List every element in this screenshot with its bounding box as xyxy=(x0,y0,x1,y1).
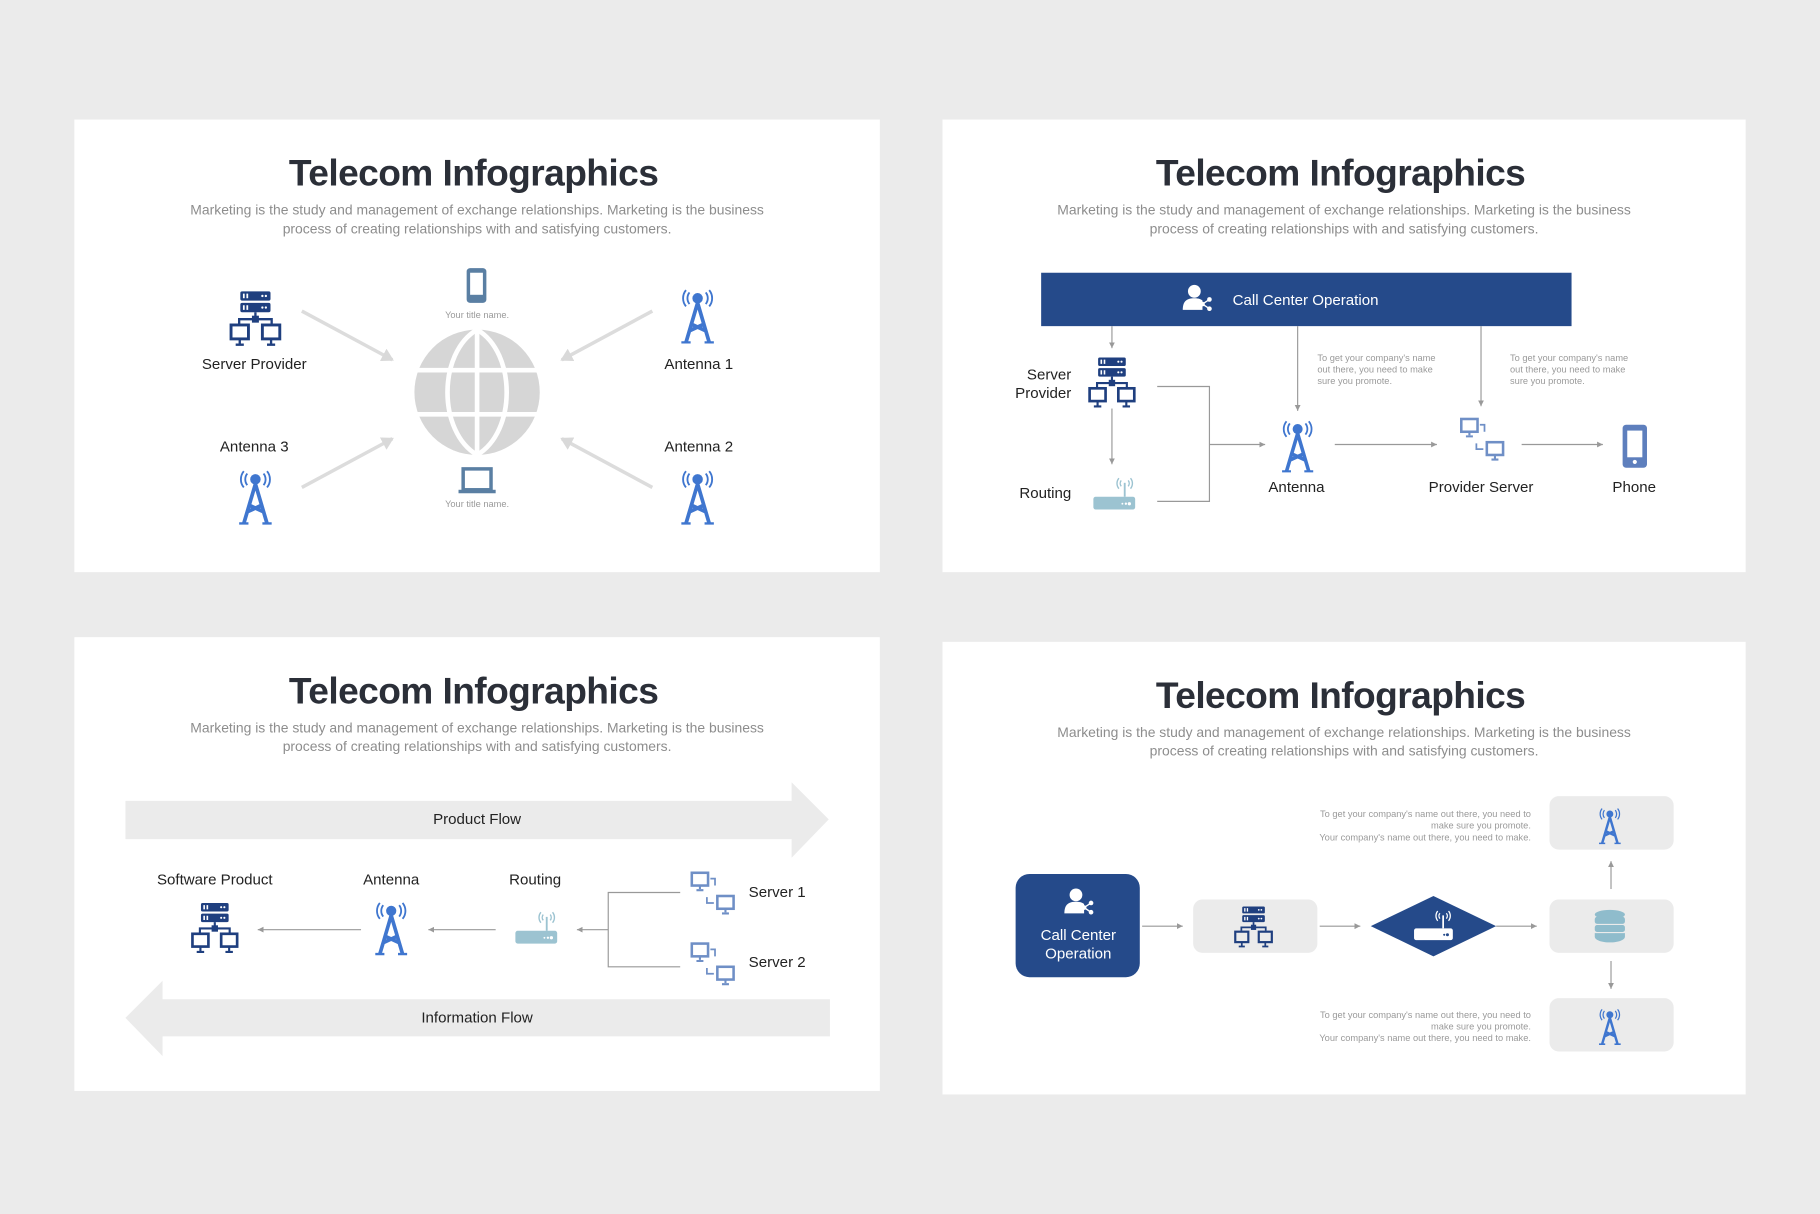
arrow: information flow xyxy=(125,981,830,1056)
node: routing xyxy=(1019,478,1135,510)
node: server 2: Server 2 xyxy=(749,954,806,971)
connectors xyxy=(1112,326,1603,501)
note text bottom: make sure you promote. xyxy=(1431,1021,1531,1031)
note texts: sure you promote. xyxy=(1317,376,1392,386)
icon: antenna 1 xyxy=(664,290,733,373)
note text top: To get your company's name out there, you need to xyxy=(1320,809,1531,819)
icon: laptop bottom: Your title name. xyxy=(445,499,509,509)
note texts: To get your company's name xyxy=(1510,353,1628,363)
box: antenna bottom xyxy=(1549,998,1674,1052)
panel: hub diagram xyxy=(74,120,880,572)
node: server 2 xyxy=(692,944,806,984)
arrow: product flow xyxy=(125,782,829,858)
diamond: router xyxy=(1371,896,1496,956)
node: antenna xyxy=(1268,421,1325,496)
title: Telecom Infographics xyxy=(1156,152,1525,194)
note text top xyxy=(1319,809,1531,842)
subtitle xyxy=(1057,724,1631,759)
subtitle: Marketing is the study and management of exchange relationships. Marketing is the business xyxy=(1057,202,1631,218)
panel: call center flow xyxy=(942,120,1746,572)
subtitle xyxy=(1057,202,1631,236)
note texts: out there, you need to make xyxy=(1317,365,1433,375)
icon: antenna 2: Antenna 2 xyxy=(664,438,733,455)
subtitle: process of creating relationships with and satisfying customers. xyxy=(283,738,671,754)
icon: server provider xyxy=(202,291,307,373)
box: server xyxy=(1193,899,1317,953)
title: Telecom Infographics xyxy=(289,669,658,711)
subtitle: Marketing is the study and management of exchange relationships. Marketing is the business xyxy=(190,202,764,218)
subtitle: Marketing is the study and management of exchange relationships. Marketing is the business xyxy=(1057,724,1631,740)
note text top: Your company's name out there, you need to make. xyxy=(1319,832,1531,842)
arrow: product flow: Product Flow xyxy=(433,811,521,828)
icon: phone top xyxy=(445,268,509,320)
node: provider server: Provider Server xyxy=(1429,479,1533,496)
node: phone: Phone xyxy=(1612,479,1656,496)
node: routing xyxy=(509,871,561,944)
title: Telecom Infographics xyxy=(289,152,658,194)
icon: server provider: Server Provider xyxy=(202,356,307,373)
box: call center operation: Call Center xyxy=(1041,927,1116,944)
subtitle: process of creating relationships with and satisfying customers. xyxy=(1150,220,1538,236)
node: routing: Routing xyxy=(509,871,561,888)
connectors xyxy=(1142,861,1611,989)
node: antenna: Antenna xyxy=(363,871,420,888)
node: server provider: Server xyxy=(1027,367,1071,384)
node: phone xyxy=(1612,425,1656,496)
arrows to globe xyxy=(302,311,652,487)
node: software product xyxy=(157,871,273,952)
node: server provider: Provider xyxy=(1015,385,1071,402)
title: Telecom Infographics xyxy=(1156,674,1525,716)
node: provider server xyxy=(1429,419,1533,496)
note texts: sure you promote. xyxy=(1510,376,1585,386)
subtitle xyxy=(190,202,764,236)
note text bottom: To get your company's name out there, you need to xyxy=(1320,1010,1531,1020)
node: server provider xyxy=(1015,357,1134,406)
note text bottom xyxy=(1319,1010,1531,1043)
box: call center operation: Operation xyxy=(1045,946,1111,963)
note text top: make sure you promote. xyxy=(1431,821,1531,831)
node: antenna: Antenna xyxy=(1268,479,1325,496)
icon: antenna 3: Antenna 3 xyxy=(220,438,289,455)
header bar: Call Center Operation xyxy=(1233,292,1378,309)
box: database xyxy=(1549,899,1674,953)
node: routing: Routing xyxy=(1019,485,1071,502)
node: server 1 xyxy=(692,873,806,913)
icon: globe xyxy=(412,328,542,456)
subtitle: Marketing is the study and management of exchange relationships. Marketing is the business xyxy=(190,719,764,735)
subtitle xyxy=(190,719,764,754)
note texts xyxy=(1317,353,1628,386)
subtitle: process of creating relationships with and satisfying customers. xyxy=(1150,743,1538,759)
note texts: out there, you need to make xyxy=(1510,365,1625,375)
icon: antenna 1: Antenna 1 xyxy=(664,356,733,373)
panel: product/information flow xyxy=(74,637,880,1091)
icon: antenna 2 xyxy=(664,438,733,523)
node: server 1: Server 1 xyxy=(749,884,806,901)
note texts: To get your company's name xyxy=(1317,353,1436,363)
header bar xyxy=(1041,273,1572,326)
icon: antenna 3 xyxy=(220,438,289,523)
node: antenna xyxy=(363,871,420,954)
box: antenna top xyxy=(1549,796,1674,850)
box: call center operation xyxy=(1016,874,1140,977)
node: software product: Software Product xyxy=(157,871,273,888)
panel: call center process xyxy=(942,642,1746,1094)
icon: laptop bottom xyxy=(445,469,509,509)
subtitle: process of creating relationships with and satisfying customers. xyxy=(283,220,671,236)
note text bottom: Your company's name out there, you need to make. xyxy=(1319,1033,1531,1043)
arrow: information flow: Information Flow xyxy=(421,1009,533,1026)
connectors xyxy=(258,893,680,967)
icon: phone top: Your title name. xyxy=(445,310,509,320)
